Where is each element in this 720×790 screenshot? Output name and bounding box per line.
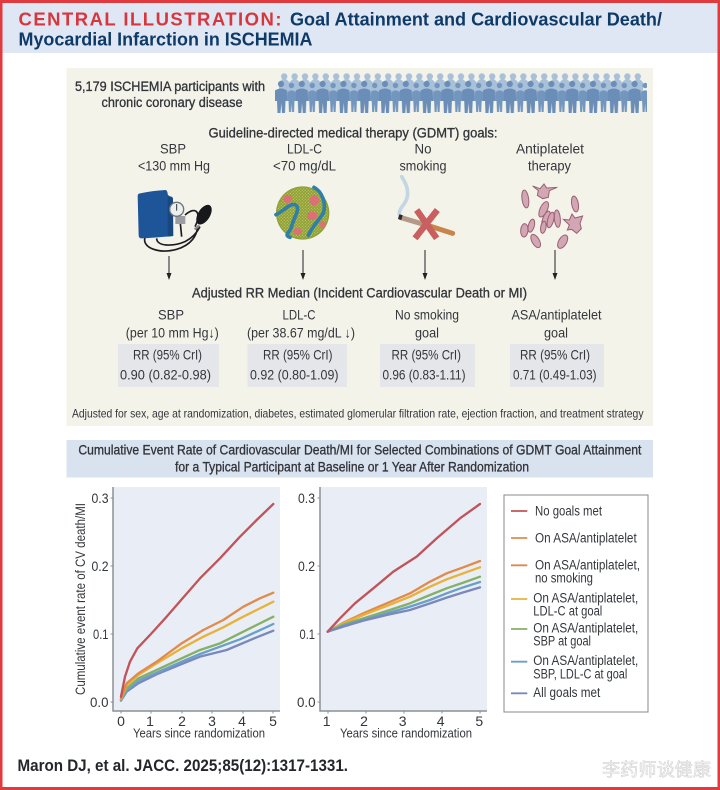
chart: event rate from baseline <box>73 487 280 740</box>
legend item: no goals met <box>511 504 602 519</box>
legend item: LDL-C at goal: LDL-C at goal <box>533 604 602 619</box>
y axis labels: 0.2 <box>298 558 315 574</box>
legend item: no goals met: No goals met <box>535 504 602 519</box>
RR column: no smoking <box>380 306 475 387</box>
RR column: SBP: SBP <box>158 306 184 322</box>
citation: Maron DJ, et al. JACC. 2025;85(12):1317-1331. <box>18 757 348 775</box>
goal label: antiplatelet: Antiplatelet <box>516 140 584 156</box>
x axis labels: 0 <box>117 713 125 729</box>
goal label: antiplatelet <box>516 140 584 174</box>
x axis labels <box>323 713 483 729</box>
chart section heading <box>66 440 653 478</box>
participants text: chronic coronary disease <box>102 95 242 110</box>
legend item: on ASA/antiplatelet: On ASA/antiplatelet <box>535 530 637 545</box>
goal label: LDL-C <box>273 140 336 174</box>
y axis title: Cumulative event rate of CV death/MI <box>73 503 88 695</box>
title banner: Myocardial Infarction in ISCHEMIA <box>18 30 312 50</box>
participants text <box>75 79 265 110</box>
RR column: LDL-C: 0.92 (0.80-1.09) <box>250 366 338 382</box>
legend item: SBP, LDL-C at goal <box>511 653 638 681</box>
goal label: SBP: <130 mm Hg <box>138 158 210 174</box>
legend item: SBP at goal: SBP at goal <box>533 634 591 649</box>
legend item: SBP, LDL-C at goal: On ASA/antiplatelet, <box>533 653 638 668</box>
watermark: 李药师谈健康 <box>602 760 711 780</box>
x axis labels: 4 <box>437 713 445 729</box>
panel: GDMT goals and adjusted RR <box>66 68 653 426</box>
y axis labels: 0.3 <box>298 490 315 506</box>
legend item: no smoking: no smoking <box>535 571 593 586</box>
icon: LDL particle <box>276 186 329 240</box>
arrow: antiplatelet <box>552 250 558 280</box>
RR column: LDL-C: RR (95% CrI) <box>263 346 332 362</box>
x axis title: Years since randomization <box>340 726 472 740</box>
icon: platelets <box>520 184 583 250</box>
legend item: SBP at goal: On ASA/antiplatelet, <box>533 620 638 635</box>
y axis labels <box>90 490 109 710</box>
arrow: LDL-C <box>300 250 306 280</box>
RR column: ASA/antiplatelet: RR (95% CrI) <box>520 346 590 362</box>
curves <box>121 504 273 701</box>
chart section heading: for a Typical Participant at Baseline or 1 Year After Randomization <box>175 458 529 474</box>
curves <box>328 504 480 632</box>
chart section heading: Cumulative Event Rate of Cardiovascular Death/MI for Selected Combinations of GDMT Goal Attainment <box>78 442 641 458</box>
icon: cigarette with red X <box>399 177 453 238</box>
RR column: no smoking: RR (95% CrI) <box>392 346 461 362</box>
goal label: SBP <box>138 140 210 174</box>
legend <box>504 495 648 712</box>
goal label: LDL-C: LDL-C <box>287 140 322 156</box>
y axis labels: 0.0 <box>90 694 109 710</box>
goal label: antiplatelet: therapy <box>528 158 571 174</box>
RR column: SBP: RR (95% CrI) <box>133 346 202 362</box>
RR column: SBP: (per 10 mm Hg↓) <box>126 324 219 340</box>
x axis labels: 3 <box>208 713 216 729</box>
arrow: no smoking <box>422 250 428 280</box>
x axis labels: 5 <box>269 713 277 729</box>
participants text: 5,179 ISCHEMIA participants with <box>75 79 265 94</box>
chart: event rate from 1 year <box>297 487 487 740</box>
title banner <box>2 3 718 53</box>
goal label: no smoking <box>400 140 446 174</box>
icon: row of people <box>275 73 647 113</box>
legend item: SBP at goal <box>511 620 638 649</box>
x axis labels: 1 <box>146 713 154 729</box>
arrow: SBP <box>166 256 172 280</box>
y axis labels: 0.0 <box>297 694 316 710</box>
legend item: LDL-C at goal: On ASA/antiplatelet, <box>533 590 638 605</box>
x axis labels: 2 <box>178 713 186 729</box>
x axis labels: 3 <box>399 713 407 729</box>
title banner: CENTRAL ILLUSTRATION: <box>18 8 282 30</box>
legend item: LDL-C at goal <box>511 590 638 619</box>
RR column: SBP: 0.90 (0.82-0.98) <box>120 366 211 382</box>
y axis labels: 0.1 <box>300 626 315 642</box>
footnote: adjustment variables: Adjusted for sex, age at randomization, diabetes, estimated glomerular filtration rate, ejection fraction, and treatment strategy <box>72 406 644 420</box>
x axis labels: 1 <box>323 713 331 729</box>
legend item: all goals met <box>511 685 601 700</box>
goal label: SBP: SBP <box>160 140 186 156</box>
goal label: no smoking: smoking <box>400 158 446 174</box>
legend item: no smoking: On ASA/antiplatelet, <box>535 557 640 572</box>
RR column: LDL-C: (per 38.67 mg/dL ↓) <box>247 324 355 340</box>
title banner: Goal Attainment and Cardiovascular Death/ <box>290 10 662 30</box>
x axis labels <box>117 713 277 729</box>
RR column: ASA/antiplatelet <box>510 306 604 387</box>
RR column: LDL-C: LDL-C <box>282 306 316 322</box>
goal label: no smoking: No <box>414 140 432 156</box>
legend item: all goals met: All goals met <box>533 685 601 700</box>
RR column: no smoking: 0.96 (0.83-1.11) <box>382 366 466 382</box>
x axis labels: 4 <box>238 713 246 729</box>
y axis labels <box>297 490 316 710</box>
heading: adjusted RR: Adjusted RR Median (Incident Cardiovascular Death or MI) <box>192 284 527 300</box>
RR column: LDL-C <box>247 306 355 387</box>
RR column: ASA/antiplatelet: ASA/antiplatelet <box>512 306 602 322</box>
x axis labels: 5 <box>475 713 483 729</box>
legend item: no smoking <box>511 557 640 586</box>
heading: GDMT goals: Guideline-directed medical therapy (GDMT) goals: <box>208 124 498 140</box>
RR column: SBP <box>118 306 219 387</box>
RR column: ASA/antiplatelet: goal <box>544 324 568 340</box>
legend item: SBP, LDL-C at goal: SBP, LDL-C at goal <box>533 666 627 681</box>
RR column: no smoking: No smoking <box>395 306 459 322</box>
RR column: ASA/antiplatelet: 0.71 (0.49-1.03) <box>513 366 596 382</box>
icon: blood pressure cuff <box>138 190 215 251</box>
goal label: LDL-C: <70 mg/dL <box>273 158 336 174</box>
x axis labels: 2 <box>360 713 368 729</box>
y axis labels: 0.3 <box>92 490 109 506</box>
RR column: no smoking: goal <box>415 324 439 340</box>
y axis labels: 0.2 <box>92 558 109 574</box>
y axis labels: 0.1 <box>93 626 109 642</box>
x axis title: Years since randomization <box>133 726 265 740</box>
